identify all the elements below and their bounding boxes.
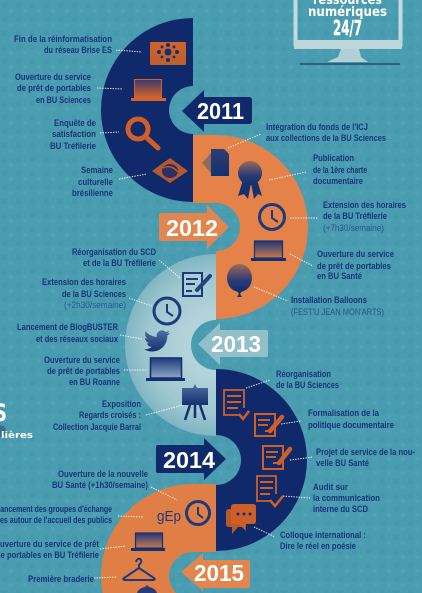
label: Balloons: (FEST'U JEAN MON'ARTS) bbox=[291, 307, 384, 318]
label: enquête: satisfaction bbox=[52, 129, 96, 140]
label: enquête: Enquête de bbox=[54, 118, 96, 129]
label: réorganisation BU Sciences bbox=[276, 369, 339, 391]
label: charte documentaire: Publication bbox=[313, 153, 354, 164]
label: portables BU Santé: de prêt de portables bbox=[317, 261, 391, 272]
arrow: 2014 bbox=[156, 438, 226, 480]
label: semaine brésilienne bbox=[72, 165, 113, 199]
label: politique documentaire bbox=[308, 408, 394, 431]
label: audit: interne du SCD bbox=[313, 504, 368, 515]
panel: 2011 dark blue half ring bbox=[101, 18, 193, 202]
label: horaires BU Sciences: (+2h30/semaine) bbox=[64, 300, 126, 311]
label: BlogBUSTER: et des réseaux sociaux bbox=[36, 334, 119, 345]
label: réorganisation BU Sciences: de la BU Sciences bbox=[276, 380, 339, 391]
arrow: 2012: 2012 bbox=[166, 215, 218, 241]
label: portables BU Sciences: de prêt de portables bbox=[17, 83, 91, 94]
label: Balloons: Installation Balloons bbox=[291, 295, 367, 306]
label: horaires BU Sciences: de la BU Sciences bbox=[62, 289, 126, 300]
arrow: 2013: 2013 bbox=[211, 331, 261, 357]
cropped side text at left edge: lières bbox=[1, 430, 33, 441]
cropped side text at left edge bbox=[0, 399, 33, 441]
monitor: ressources numériques 24/7: 24/7 bbox=[333, 16, 362, 40]
icon: laptop bbox=[251, 241, 286, 261]
icon: cropped round item bbox=[137, 585, 157, 593]
label: portables BU Sciences: en BU Sciences bbox=[36, 95, 91, 106]
label: réinformatisation bbox=[14, 34, 112, 56]
icon: note and pen bbox=[263, 446, 290, 469]
label: réorganisation SCD bbox=[72, 247, 156, 269]
icon: checklist bbox=[257, 476, 283, 506]
label: BlogBUSTER: Lancement de BlogBUSTER bbox=[17, 322, 118, 333]
label: braderie: Première braderie bbox=[28, 574, 94, 585]
label: portables BU Santé: en BU Santé bbox=[317, 271, 362, 282]
label: portables BU Sciences: Ouverture du service bbox=[15, 72, 91, 83]
monitor: ressources numériques 24/7: numériques bbox=[308, 5, 387, 20]
label: horaires BU Sciences bbox=[42, 277, 126, 311]
icon: speech bubbles bbox=[226, 504, 256, 534]
label: fonds ICJ bbox=[266, 122, 386, 144]
arrow: 2015: 2015 bbox=[194, 560, 244, 586]
icon: network bbox=[150, 42, 186, 65]
icon: clock bbox=[154, 298, 180, 324]
label: portables BU Santé: Ouverture du service bbox=[317, 249, 394, 260]
label: colloque: Colloque international : bbox=[280, 530, 366, 541]
label: fonds ICJ: Intégration du fonds de l'ICJ bbox=[266, 122, 368, 133]
icon: easel bbox=[182, 384, 208, 420]
icon: laptop bbox=[131, 533, 165, 551]
label: audit bbox=[313, 482, 380, 515]
label: charte documentaire bbox=[313, 153, 367, 187]
label: audit: Audit sur bbox=[313, 482, 348, 493]
panel: 2012 orange half ring bbox=[193, 135, 308, 319]
label: enquête bbox=[50, 118, 96, 152]
label: portables BU Roanne: de prêt de portables bbox=[47, 366, 120, 377]
label: audit: la communication bbox=[313, 493, 380, 504]
label: horaires Tréfilerie: de la BU Tréfilerie bbox=[323, 211, 387, 222]
label: réinformatisation: du réseau Brise ES bbox=[44, 45, 112, 56]
panel: 2014 dark blue half ring bbox=[216, 369, 307, 551]
label: projet de service: velle BU Santé bbox=[316, 458, 369, 469]
label: portables BU Roanne: Ouverture du service bbox=[44, 355, 120, 366]
icon: document transfer bbox=[202, 149, 229, 176]
label: horaires Tréfilerie bbox=[323, 200, 406, 234]
arrow: 2012 bbox=[159, 205, 229, 249]
label: charte documentaire: documentaire bbox=[313, 176, 363, 187]
icon: gEp logo: gEp bbox=[157, 508, 181, 525]
label: portables BU Tréfilerie bbox=[0, 539, 100, 561]
label: horaires Tréfilerie: (+7h30/semaine) bbox=[323, 223, 384, 234]
label: colloque bbox=[280, 530, 366, 552]
label: BlogBUSTER bbox=[17, 322, 119, 345]
label: charte documentaire: de la 1ère charte bbox=[313, 165, 367, 176]
monitor: ressources numériques 24/7 bbox=[294, 0, 402, 65]
label: politique documentaire: politique documentaire bbox=[308, 420, 394, 431]
icon: clock bbox=[260, 204, 284, 230]
icon: magnifier bbox=[128, 119, 158, 148]
label: portables BU Roanne: en BU Roanne bbox=[69, 377, 120, 388]
icon: balloon bbox=[227, 264, 252, 297]
label: exposition: Collection Jacquie Barral bbox=[53, 422, 141, 433]
icon: note and pen bbox=[183, 273, 210, 296]
label: portables BU Santé bbox=[317, 249, 394, 282]
label: exposition bbox=[53, 399, 141, 433]
icon: clock bbox=[186, 502, 210, 524]
label: exposition: Regards croisés : bbox=[79, 410, 141, 421]
label: semaine brésilienne: brésilienne bbox=[72, 188, 113, 199]
label: enquête: BU Tréfilerie bbox=[50, 141, 96, 152]
label: réinformatisation: Fin de la réinformatisation bbox=[14, 34, 112, 45]
label: projet de service bbox=[316, 447, 415, 469]
label: horaires BU Sciences: Extension des horaires bbox=[42, 277, 126, 288]
label: nouvelle BU Santé bbox=[52, 469, 148, 491]
label: nouvelle BU Santé: BU Santé (+1h30/semaine) bbox=[52, 480, 148, 491]
label: exposition: Exposition bbox=[102, 399, 141, 410]
arrow: 2013 bbox=[198, 323, 268, 365]
label: semaine brésilienne: Semaine bbox=[81, 165, 113, 176]
label: groupes d'échange: Lancement des groupes d'échange bbox=[0, 504, 112, 515]
label: semaine brésilienne: culturelle bbox=[78, 177, 113, 188]
icon: note and pen bbox=[255, 414, 282, 436]
label: groupes d'échange bbox=[0, 504, 112, 526]
label: nouvelle BU Santé: Ouverture de la nouvelle bbox=[58, 469, 148, 480]
label: fonds ICJ: aux collections de la BU Sciences bbox=[266, 133, 386, 144]
label: politique documentaire: Formalisation de la bbox=[308, 408, 380, 419]
label: portables BU Sciences bbox=[15, 72, 91, 106]
arrow: 2011 bbox=[182, 90, 252, 132]
icon: checklist bbox=[224, 390, 249, 419]
panel: 2015 orange half ring bbox=[101, 484, 216, 593]
arrow: 2015 bbox=[181, 553, 250, 591]
icon: hanger bbox=[123, 559, 155, 580]
label: groupes d'échange: es autour de l'accueil des publics bbox=[0, 515, 112, 526]
icon: ribbon bbox=[238, 161, 262, 199]
label: Balloons bbox=[291, 295, 384, 318]
arrow: 2014: 2014 bbox=[163, 447, 215, 473]
label: réorganisation SCD: Réorganisation du SCD bbox=[72, 247, 156, 258]
label: réorganisation SCD: et de la BU Tréfilerie bbox=[83, 258, 156, 269]
icon: twitter bird bbox=[144, 330, 170, 351]
label: réorganisation BU Sciences: Réorganisation bbox=[276, 369, 331, 380]
label: colloque: Dire le réel en poésie bbox=[280, 541, 356, 552]
arrow: 2011: 2011 bbox=[197, 98, 244, 124]
icon: laptop bbox=[146, 358, 185, 381]
icon: laptop bbox=[131, 80, 166, 101]
icon: Brazil diamond bbox=[152, 158, 188, 183]
panel: 2013 light half ring bbox=[125, 254, 216, 436]
label: portables BU Roanne bbox=[44, 355, 120, 388]
